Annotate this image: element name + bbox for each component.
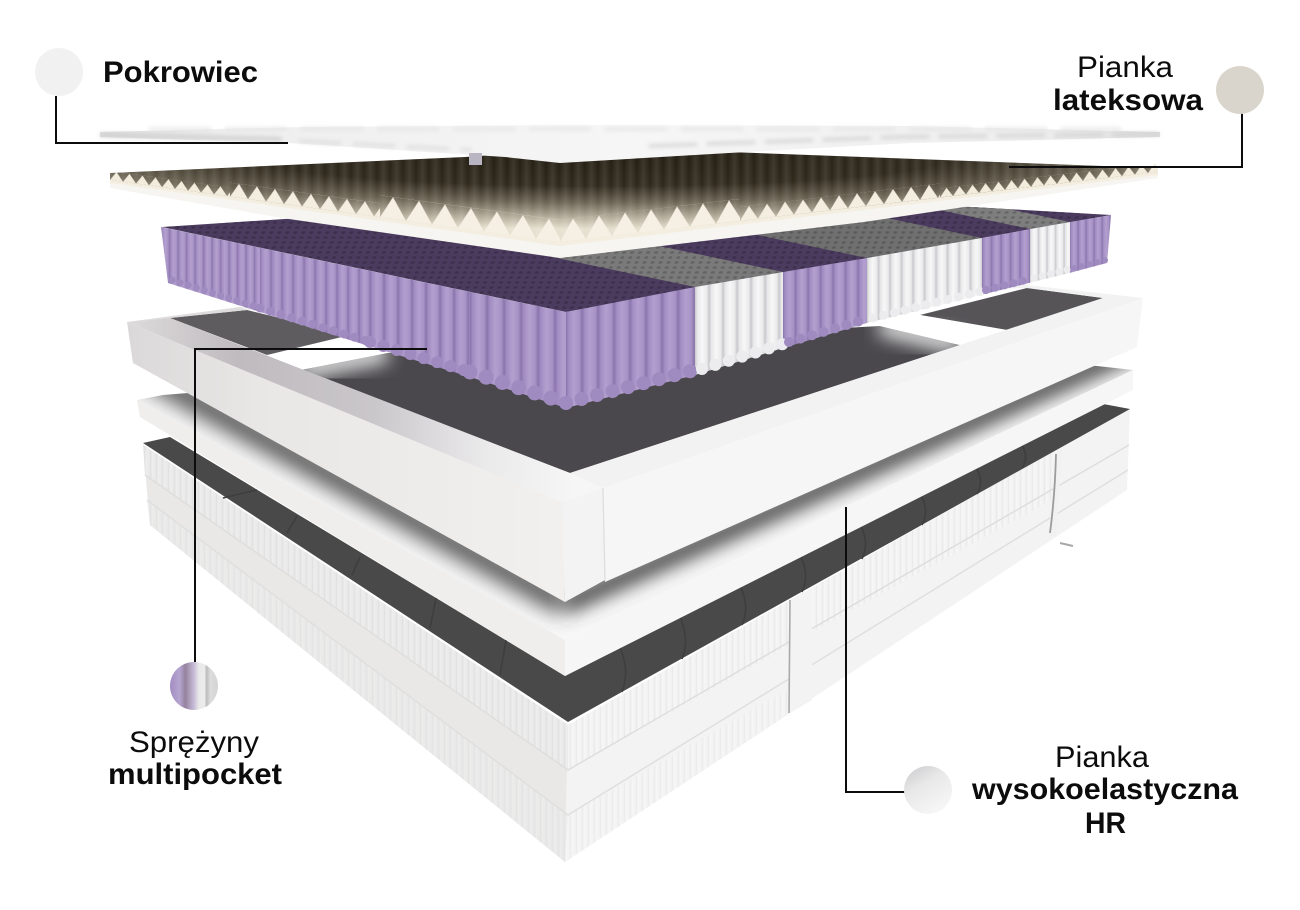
latex textured top [110, 150, 1158, 243]
callout: Pianka wysokoelastyczna HR [846, 507, 1238, 840]
label [1053, 51, 1203, 117]
base left side [143, 445, 568, 862]
callout: Pianka lateksowa [1009, 51, 1264, 167]
label: HR [1085, 807, 1126, 840]
layer: HR foam frame [127, 285, 1143, 602]
dark quilted top strip [143, 403, 1130, 722]
label: lateksowa [1053, 84, 1203, 117]
shadow under frame [133, 348, 1137, 604]
icon: HR foam swatch [904, 766, 952, 814]
small mark [1060, 543, 1073, 546]
label: multipocket [108, 758, 282, 791]
strap right [1049, 450, 1062, 537]
callout: Pokrowiec [35, 48, 288, 143]
cover quilting shading [102, 129, 1158, 150]
frame opening [170, 288, 1103, 473]
latex cream band [110, 172, 1158, 246]
strap front [789, 588, 812, 713]
spring right face columns [566, 215, 1111, 408]
frame corner face [562, 488, 605, 602]
icon: spring swatch [170, 662, 218, 710]
label: Pianka [1077, 51, 1173, 84]
thin sheet right side [565, 370, 1133, 676]
cover tag [469, 153, 482, 165]
leader line [195, 349, 427, 662]
spring scalloped bottoms [172, 260, 1106, 403]
label: Sprężyny [129, 726, 259, 759]
base right side [565, 409, 1130, 862]
layer: thin HR foam sheet [133, 348, 1137, 676]
frame left face [127, 322, 565, 602]
latex front teeth [110, 163, 1158, 242]
base ribbed bands [143, 445, 1129, 862]
label: Pokrowiec [103, 56, 258, 89]
spring left face columns [161, 227, 566, 408]
cover quilted sheet [100, 125, 1160, 163]
thin sheet top [137, 350, 1133, 640]
label: wysokoelastyczna [971, 773, 1238, 806]
label [971, 741, 1238, 840]
label: Pianka [1055, 741, 1149, 774]
layer: multipocket springs [161, 206, 1111, 410]
frame top rim [127, 285, 1143, 581]
label [108, 726, 282, 791]
icon: cover swatch [35, 48, 83, 96]
layer: cover [100, 125, 1160, 165]
spring top surface [162, 206, 1110, 312]
leader line [846, 507, 905, 792]
layer: latex foam [110, 150, 1158, 258]
frame right face [605, 298, 1143, 582]
icon: latex swatch [1216, 66, 1264, 114]
callout: Sprężyny multipocket [108, 349, 427, 791]
leader line [56, 96, 288, 143]
leader line [1009, 113, 1242, 167]
thin sheet left side [137, 400, 565, 676]
latex bottom white strip [110, 172, 1158, 258]
layer: base mattress with quilted cover [143, 403, 1130, 862]
